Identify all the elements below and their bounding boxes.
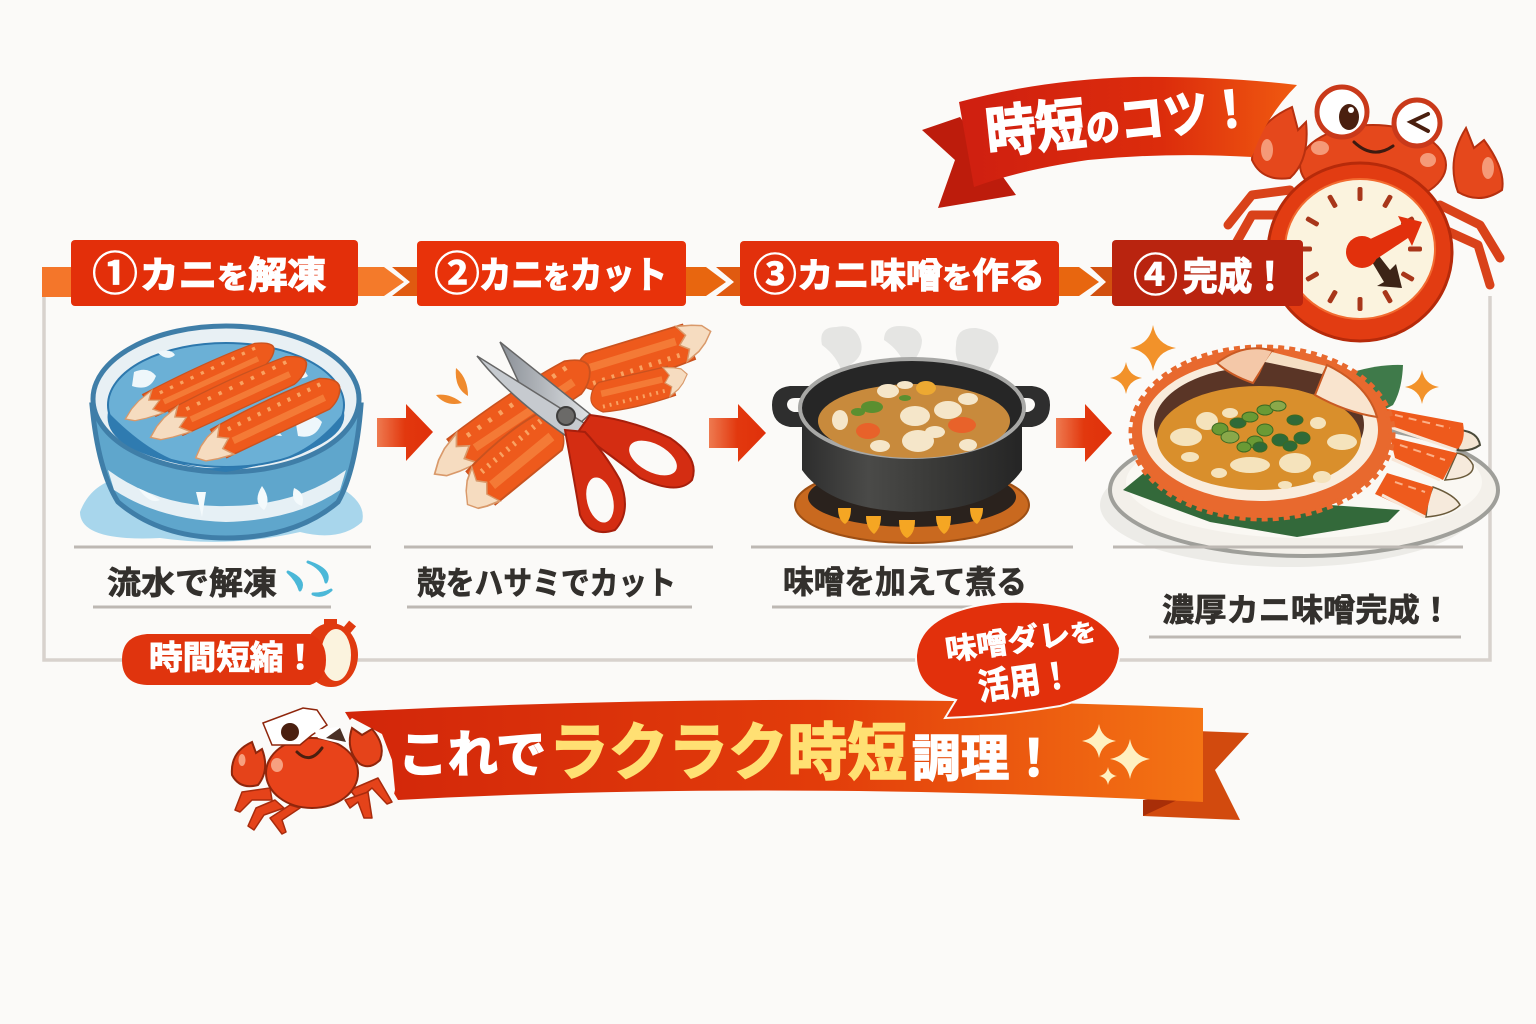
stopwatch	[304, 623, 358, 687]
crab shell	[1132, 348, 1392, 518]
pot body	[802, 408, 1022, 512]
step 2 label: カニをカット	[479, 255, 667, 296]
pot rim	[800, 359, 1024, 457]
sparkles	[1082, 724, 1150, 785]
smile	[1354, 142, 1393, 152]
step 1 label: カニを解凍	[140, 255, 326, 296]
leaves	[1123, 468, 1400, 537]
claws	[232, 742, 265, 786]
edamame topping	[1212, 401, 1310, 452]
crab leg 2	[142, 349, 313, 448]
plate	[1110, 424, 1498, 556]
heading ribbon: 時短のコツ	[922, 74, 1297, 208]
arrow 2	[709, 404, 766, 462]
time-saving badge	[122, 619, 358, 687]
pill	[122, 634, 326, 685]
water	[108, 343, 344, 467]
bottom ribbon	[345, 700, 1249, 820]
step 1 number: ①	[92, 248, 138, 300]
right claw	[1454, 128, 1503, 198]
pot handles	[772, 386, 812, 427]
caption 3: 味噌を加えて煮る	[783, 564, 1027, 600]
caption 2: 殻をハサミでカット	[417, 565, 676, 601]
top ribbon bar	[42, 267, 1120, 297]
step 3 number: ③	[753, 251, 797, 300]
ribbon text: highlight: ラクラク時短	[549, 719, 907, 788]
step header 1	[71, 240, 358, 306]
crab miso filling	[1157, 386, 1361, 490]
white sticker outline	[232, 706, 395, 820]
water swoosh icon	[288, 562, 331, 595]
caption 1: 流水で解凍	[107, 565, 277, 601]
rim	[93, 326, 359, 472]
crab body	[1300, 125, 1446, 205]
scissor handles	[578, 415, 694, 488]
small crab mascot	[232, 706, 395, 834]
burner base	[795, 467, 1029, 543]
crab leg pieces	[570, 318, 718, 396]
bowl body	[92, 405, 361, 538]
crab legs	[1228, 190, 1500, 285]
legs	[235, 778, 392, 834]
arrow 1	[377, 404, 433, 461]
ribbon text: ending: 調理！	[912, 731, 1058, 787]
step header 2	[417, 241, 686, 306]
speech bubble: 味噌ダレを活用: 味噌ダレを	[943, 613, 1098, 668]
scene 2: scissors cutting crab legs	[420, 318, 718, 532]
step header 3	[740, 241, 1059, 306]
heading text: 時短のコツ！	[983, 74, 1256, 165]
right eye	[314, 727, 349, 744]
flames	[838, 508, 983, 538]
body	[266, 738, 358, 808]
ribbon tail	[1143, 730, 1249, 820]
crab leg 3	[186, 371, 347, 469]
shell interior	[1154, 367, 1364, 483]
right eye wink	[1394, 100, 1440, 146]
clock	[1268, 163, 1452, 341]
caption 4: 濃厚カニ味噌完成！	[1162, 592, 1452, 628]
step 4 number: ④	[1133, 250, 1178, 301]
scissor blades	[500, 342, 590, 432]
crab leg 1	[118, 336, 280, 428]
cut sparks	[436, 368, 468, 404]
speech bubble: 味噌ダレを活用: 活用！	[975, 654, 1074, 708]
arrow 3	[1056, 404, 1112, 462]
scene 4: finished crab shell on a plate	[1100, 325, 1498, 567]
cheeks	[1311, 141, 1436, 167]
left eye and head patch	[263, 708, 327, 745]
scene 3: miso pot on a burner	[772, 326, 1050, 543]
plate shadow	[1100, 443, 1480, 567]
left claw	[1252, 107, 1307, 179]
speech bubble: 味噌ダレを活用	[916, 602, 1120, 718]
step 3 label: カニ味噌を作る	[797, 257, 1045, 296]
step 2 number: ②	[434, 248, 480, 300]
puddle	[80, 476, 363, 542]
step 4 label: 完成！	[1183, 257, 1287, 299]
clock hands	[1372, 252, 1402, 288]
steam	[821, 326, 999, 402]
step header 4	[1112, 240, 1303, 306]
shell flap and roe	[1217, 348, 1273, 383]
ribbon body	[345, 700, 1203, 802]
soup	[818, 384, 1010, 458]
timer crab mascot	[1228, 87, 1503, 341]
badge text: 時間短縮！	[149, 639, 317, 676]
smile	[297, 748, 322, 758]
scene 1: crab legs thawing in a bowl of water	[80, 326, 363, 542]
caption 1	[107, 562, 331, 601]
clock ticks	[1298, 187, 1422, 311]
left eye	[1317, 87, 1367, 137]
crab legs on plate	[1375, 407, 1480, 517]
sparkles	[1110, 325, 1439, 404]
panel: steps frame	[44, 296, 1490, 660]
ribbon text: intro: これで	[398, 727, 546, 783]
